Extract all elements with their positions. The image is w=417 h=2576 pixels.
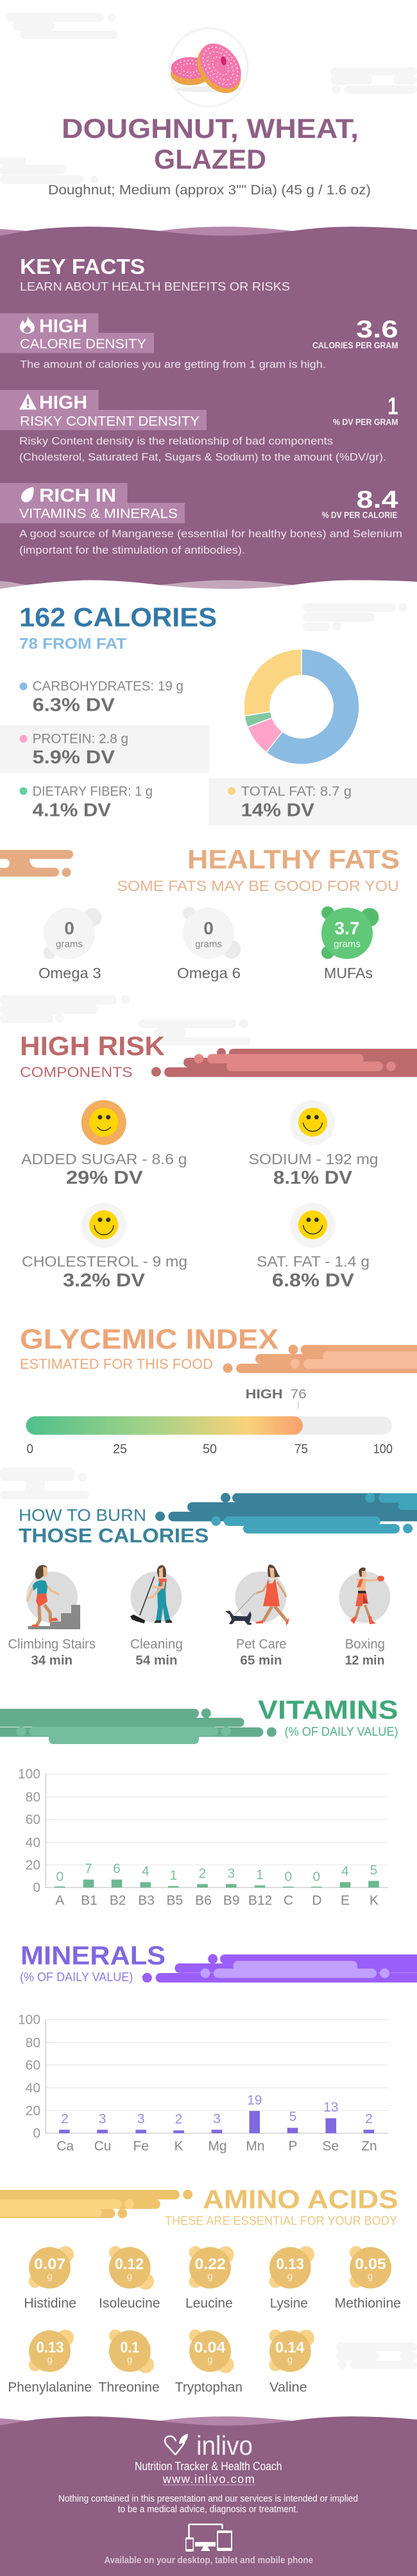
risk: sodium xyxy=(249,1100,379,1189)
amino acid: phenylalanine: Phenylalanine xyxy=(8,2380,92,2394)
icon: flame xyxy=(20,316,35,334)
stat: omega 3 xyxy=(38,908,101,981)
amino acid: threonine: Threonine xyxy=(98,2380,160,2394)
bar chart: minerals: 40 xyxy=(26,2081,40,2096)
icon: stairs xyxy=(28,1605,80,1629)
fact: calorie density: HIGH xyxy=(39,316,87,337)
activity: cleaning: 54 min xyxy=(135,1654,177,1668)
bar chart: vitamins: B6 xyxy=(195,1893,212,1908)
macro: carbohydrates: CARBOHYDRATES: 19 g xyxy=(33,679,183,694)
bar chart: minerals: 80 xyxy=(26,2035,40,2050)
heading: glycemic index: ESTIMATED FOR THIS FOOD xyxy=(20,1356,213,1372)
heading: healthy fats xyxy=(0,844,400,894)
bar chart: vitamins xyxy=(18,1767,388,1908)
bar chart: minerals: 20 xyxy=(26,2103,40,2118)
amino acid: methionine: g xyxy=(368,2271,373,2282)
heading: vitamins xyxy=(0,1695,398,1744)
bar chart: vitamins: B3 xyxy=(138,1893,155,1908)
icon: smiley xyxy=(298,1108,327,1137)
bar chart: vitamins: 0 xyxy=(313,1869,320,1884)
gauge: glycemic index: 50 xyxy=(203,1443,217,1457)
amino acid: leucine xyxy=(185,2246,234,2311)
disclaimer: Nothing contained in this presentation and our services is intended or implied xyxy=(58,2494,358,2504)
risk: added sugar: 29% DV xyxy=(66,1168,143,1189)
heading: healthy fats: SOME FATS MAY BE GOOD FOR YOU xyxy=(117,877,399,894)
fact: calorie density: CALORIES PER GRAM xyxy=(312,341,398,350)
bar chart: vitamins: E xyxy=(341,1893,350,1908)
title: GLAZED xyxy=(154,145,266,175)
heading: vitamins: (% OF DAILY VALUE) xyxy=(285,1725,398,1739)
stat: omega 3: 0 xyxy=(64,919,74,938)
activity: boxing: Boxing xyxy=(345,1637,385,1652)
heading: calories: 78 FROM FAT xyxy=(19,636,126,653)
fact: calorie density: 3.6 xyxy=(356,316,398,343)
risk: saturated fat xyxy=(257,1203,370,1291)
heading: high risk components: HIGH RISK xyxy=(20,1031,165,1061)
banner: amino acids xyxy=(0,2190,192,2218)
fact: rich in vitamins and minerals: (important for the stimulation of antibodies). xyxy=(19,545,245,556)
risk: saturated fat: 6.8% DV xyxy=(272,1271,354,1291)
amino acid: phenylalanine: 0.13 xyxy=(36,2339,64,2357)
banner: high risk xyxy=(151,1048,417,1077)
bar chart: minerals: 3 xyxy=(99,2112,106,2126)
fact: risky content density: 1 xyxy=(387,393,398,420)
activity: pet care xyxy=(225,1564,289,1668)
heading: calories xyxy=(19,602,217,653)
heading: how to burn those calories: THOSE CALORIES xyxy=(19,1523,209,1546)
amino acid: isoleucine: g xyxy=(127,2271,132,2282)
amino acid: phenylalanine xyxy=(8,2330,92,2394)
bar chart: minerals: Mn xyxy=(246,2139,265,2154)
amino acid: histidine xyxy=(24,2246,76,2311)
bar chart: minerals: Fe xyxy=(133,2139,149,2154)
amino acid: lysine xyxy=(269,2246,314,2311)
availability note: Available on your desktop, tablet and mobile phone xyxy=(104,2555,313,2566)
fact: rich in vitamins and minerals: A good source of Manganese (essential for healthy bones) and Selenium xyxy=(19,529,402,540)
heading: minerals xyxy=(20,1940,417,1984)
risk: sodium: 8.1% DV xyxy=(273,1168,352,1189)
amino acid: leucine: Leucine xyxy=(185,2296,233,2311)
amino acid: valine: Valine xyxy=(269,2380,307,2394)
activity: boxing xyxy=(339,1568,390,1668)
macro: total fat: TOTAL FAT: 8.7 g xyxy=(241,784,352,799)
bar chart: minerals: P xyxy=(288,2139,298,2154)
bar chart: vitamins: 80 xyxy=(26,1790,40,1804)
bar chart: minerals: 13 xyxy=(323,2100,338,2115)
bar chart: minerals: 60 xyxy=(26,2058,40,2072)
macro: total fat xyxy=(208,778,417,826)
amino acid: leucine: 0.22 xyxy=(195,2256,226,2273)
macro: carbohydrates xyxy=(19,679,183,715)
heading: how to burn those calories: HOW TO BURN xyxy=(19,1505,146,1525)
heading: glycemic index xyxy=(20,1324,417,1373)
risk: added sugar xyxy=(21,1100,187,1189)
fact: risky content density: HIGH xyxy=(39,393,87,413)
icon: woman sweeping xyxy=(130,1565,173,1623)
bar chart: vitamins: C xyxy=(284,1893,293,1908)
title xyxy=(62,114,359,175)
bar chart: vitamins: 7 xyxy=(85,1861,92,1876)
amino acid: tryptophan xyxy=(175,2330,243,2394)
bar chart: vitamins: 60 xyxy=(26,1813,40,1827)
stat: omega 6: 0 xyxy=(203,919,214,938)
heading: vitamins: VITAMINS xyxy=(258,1695,398,1724)
bar chart: vitamins: 3 xyxy=(227,1866,235,1881)
activity: climbing stairs: 34 min xyxy=(31,1654,72,1668)
risk: sodium: SODIUM - 192 mg xyxy=(249,1151,379,1167)
risk: cholesterol: 3.2% DV xyxy=(63,1271,145,1291)
hero image: doughnuts in ring xyxy=(169,28,251,106)
bar chart: minerals xyxy=(18,2013,388,2154)
bar chart: vitamins: 1 xyxy=(256,1868,264,1883)
heading: minerals: (% OF DAILY VALUE) xyxy=(20,1970,133,1984)
amino acid: lysine: Lysine xyxy=(270,2296,308,2311)
bar chart: vitamins: B12 xyxy=(248,1893,272,1908)
amino acid: valine: 0.14 xyxy=(275,2339,305,2357)
bar chart: minerals: Se xyxy=(323,2139,339,2154)
stat: omega 6: grams xyxy=(195,939,222,950)
heading: high risk components xyxy=(20,1031,417,1080)
heading: key facts: KEY FACTS xyxy=(20,255,145,279)
fact: calorie density: CALORIE DENSITY xyxy=(20,337,146,352)
bar chart: minerals: 2 xyxy=(175,2112,182,2127)
bar chart: vitamins: B5 xyxy=(167,1893,183,1908)
disclaimer xyxy=(58,2494,358,2515)
bar chart: minerals: Cu xyxy=(94,2139,111,2154)
bar chart: vitamins: D xyxy=(312,1893,322,1908)
heading: key facts: LEARN ABOUT HEALTH BENEFITS OR RISKS xyxy=(20,280,290,293)
amino acid: lysine: g xyxy=(287,2271,293,2282)
bar chart: minerals: 2 xyxy=(61,2112,69,2126)
serving size subtitle: Doughnut; Medium (approx 3"" Dia) (45 g / 1.6 oz) xyxy=(48,183,371,198)
heading: key facts xyxy=(20,255,290,293)
banner: minerals xyxy=(142,1954,417,1983)
tagline: Nutrition Tracker & Health Coach xyxy=(135,2460,282,2473)
activity: pet care: Pet Care xyxy=(236,1637,286,1652)
bar chart: minerals: 3 xyxy=(137,2112,145,2126)
gauge: glycemic index: 75 xyxy=(294,1443,308,1457)
bar chart: minerals: 3 xyxy=(213,2112,221,2126)
fact: risky content density: Risky Content density is the relationship of bad components xyxy=(19,436,333,447)
fact: risky content density: RISKY CONTENT DENSITY xyxy=(20,414,200,428)
bar chart: vitamins: 1 xyxy=(169,1868,177,1883)
stat: omega 3: grams xyxy=(56,939,83,950)
banner: vitamins xyxy=(0,1709,277,1744)
amino acid: isoleucine: 0.12 xyxy=(115,2256,144,2273)
logo: inlivo xyxy=(165,2430,253,2461)
macro: protein xyxy=(0,725,209,773)
gauge: glycemic index xyxy=(26,1387,393,1457)
gauge: glycemic index: 0 xyxy=(27,1443,33,1457)
activity: climbing stairs: Climbing Stairs xyxy=(8,1637,96,1652)
bar chart: vitamins: K xyxy=(370,1893,379,1908)
amino acid: histidine: g xyxy=(47,2271,53,2282)
banner: healthy fats xyxy=(0,850,73,877)
bar chart: vitamins: 0 xyxy=(33,1881,40,1895)
heading: high risk components: COMPONENTS xyxy=(20,1064,133,1080)
macro: dietary fiber: DIETARY FIBER: 1 g xyxy=(33,784,153,799)
activity: pet care: 65 min xyxy=(240,1654,282,1668)
amino acid: phenylalanine: g xyxy=(47,2354,53,2365)
title: DOUGHNUT, WHEAT, xyxy=(62,114,359,144)
risk: added sugar: ADDED SUGAR - 8.6 g xyxy=(21,1151,187,1167)
bar chart: minerals: Zn xyxy=(361,2139,377,2154)
icon: boxer xyxy=(350,1568,384,1624)
amino acid: lysine: 0.13 xyxy=(276,2256,304,2273)
activity: cleaning xyxy=(130,1565,183,1668)
risk: cholesterol xyxy=(22,1203,187,1291)
amino acid: methionine: Methionine xyxy=(335,2296,401,2311)
amino acid: valine: g xyxy=(287,2354,293,2365)
activity: climbing stairs xyxy=(8,1565,96,1668)
bar chart: vitamins: 4 xyxy=(341,1864,349,1879)
amino acid: histidine: Histidine xyxy=(24,2296,76,2311)
stat: MUFAs: 3.7 xyxy=(335,919,359,938)
fact: risky content density: % DV PER GRAM xyxy=(333,418,398,427)
gauge: glycemic index: 100 xyxy=(373,1443,393,1457)
fact: risky content density: (Cholesterol, Saturated Fat, Sugars & Sodium) to the amount (%DV/gr). xyxy=(19,452,386,463)
bar chart: minerals: 2 xyxy=(365,2112,373,2126)
heading: minerals: MINERALS xyxy=(21,1940,166,1970)
amino acid: methionine: 0.05 xyxy=(355,2256,386,2273)
amino acid: threonine xyxy=(98,2330,160,2394)
activity: boxing: 12 min xyxy=(345,1654,385,1668)
fact: risky content density xyxy=(0,390,398,463)
fact: rich in vitamins and minerals: 8.4 xyxy=(357,487,398,514)
stat: omega 6: Omega 6 xyxy=(177,965,241,981)
panel: footer xyxy=(0,2416,417,2576)
macro: dietary fiber xyxy=(19,784,153,820)
bar chart: minerals: Mg xyxy=(208,2139,227,2154)
banner: glycemic index xyxy=(223,1344,417,1373)
amino acid: threonine: 0.1 xyxy=(121,2339,139,2357)
icon: woman walking dog xyxy=(225,1564,289,1625)
panel: key facts xyxy=(0,226,417,589)
amino acid: tryptophan: g xyxy=(207,2354,213,2365)
macro: carbohydrates: 6.3% DV xyxy=(33,695,115,715)
macro: protein: 5.9% DV xyxy=(33,747,115,768)
heading: how to burn those calories xyxy=(19,1493,417,1546)
bar chart: vitamins: 100 xyxy=(18,1767,40,1782)
bar chart: vitamins: B9 xyxy=(223,1893,240,1908)
icon: woman climbing xyxy=(28,1565,60,1627)
bar chart: minerals: Ca xyxy=(56,2139,74,2154)
amino acid: isoleucine xyxy=(99,2246,160,2311)
macro: protein: PROTEIN: 2.8 g xyxy=(33,732,128,747)
bar chart: minerals: 100 xyxy=(18,2013,40,2028)
heading: healthy fats: HEALTHY FATS xyxy=(187,844,400,874)
gauge: glycemic index: HIGH xyxy=(246,1387,283,1402)
stat: MUFAs: MUFAs xyxy=(324,965,373,981)
logo: inlivo: inlivo xyxy=(196,2430,253,2461)
macro: total fat: 14% DV xyxy=(241,800,314,820)
amino acid: methionine xyxy=(335,2246,401,2311)
heading: amino acids: THESE ARE ESSENTIAL FOR YOUR BODY xyxy=(165,2214,397,2228)
stat: omega 6 xyxy=(177,907,241,981)
stat: MUFAs: grams xyxy=(334,939,361,950)
amino acid: tryptophan: Tryptophan xyxy=(175,2380,243,2394)
amino acid: leucine: g xyxy=(207,2271,213,2282)
amino acid: valine xyxy=(269,2330,314,2394)
bar chart: minerals: 19 xyxy=(247,2093,262,2108)
icon: devices xyxy=(185,2525,232,2552)
icon: warning triangle xyxy=(19,394,37,409)
bar chart: vitamins: 0 xyxy=(285,1869,292,1884)
bar chart: vitamins: 4 xyxy=(142,1864,149,1879)
gauge: glycemic index: 25 xyxy=(113,1443,127,1457)
fact: rich in vitamins and minerals: % DV PER CALORIE xyxy=(322,511,398,520)
heading: amino acids xyxy=(0,2184,398,2228)
stat: omega 3: Omega 3 xyxy=(38,965,101,981)
icon: leaf xyxy=(21,487,33,502)
risk: cholesterol: CHOLESTEROL - 9 mg xyxy=(22,1253,187,1269)
bar chart: vitamins: B2 xyxy=(110,1893,126,1908)
activity: cleaning: Cleaning xyxy=(130,1637,183,1652)
amino acid: histidine: 0.07 xyxy=(34,2256,65,2273)
icon: smiley xyxy=(89,1108,118,1137)
fact: rich in vitamins and minerals xyxy=(0,483,402,556)
stat: MUFAs xyxy=(321,906,379,981)
bar chart: minerals: K xyxy=(174,2139,183,2154)
website link: www.inlivo.com xyxy=(162,2473,255,2486)
donut chart xyxy=(244,649,359,765)
bar chart: vitamins: 0 xyxy=(56,1869,64,1884)
heading: calories: 162 CALORIES xyxy=(19,602,217,632)
macro: dietary fiber: 4.1% DV xyxy=(33,800,111,820)
fact: rich in vitamins and minerals: VITAMINS & MINERALS xyxy=(19,507,178,521)
bar chart: vitamins: 6 xyxy=(113,1861,121,1876)
icon: smiley xyxy=(89,1210,118,1239)
fact: calorie density: The amount of calories you are getting from 1 gram is high. xyxy=(20,359,326,371)
bar chart: vitamins: 5 xyxy=(370,1863,377,1878)
gauge: glycemic index: 76 xyxy=(291,1387,307,1402)
bar chart: vitamins: 20 xyxy=(26,1858,40,1872)
bar chart: vitamins: A xyxy=(55,1893,64,1908)
amino acid: isoleucine: Isoleucine xyxy=(99,2296,160,2311)
heading: glycemic index: GLYCEMIC INDEX xyxy=(20,1324,278,1355)
fact: calorie density xyxy=(0,313,398,371)
bar chart: minerals: 0 xyxy=(33,2126,40,2141)
risk: saturated fat: SAT. FAT - 1.4 g xyxy=(257,1253,370,1269)
bar chart: vitamins: 2 xyxy=(199,1866,206,1881)
icon: smiley xyxy=(298,1210,327,1239)
bar chart: minerals: 5 xyxy=(289,2110,296,2124)
amino acid: tryptophan: 0.04 xyxy=(194,2339,226,2357)
bar chart: vitamins: 40 xyxy=(26,1835,40,1850)
disclaimer: to be a medical advice, diagnosis or treatment. xyxy=(118,2505,298,2515)
bar chart: vitamins: B1 xyxy=(81,1893,98,1908)
banner: how to burn xyxy=(155,1493,417,1534)
heading: amino acids: AMINO ACIDS xyxy=(203,2184,398,2214)
fact: rich in vitamins and minerals: RICH IN xyxy=(39,486,116,506)
amino acid: threonine: g xyxy=(127,2354,132,2365)
